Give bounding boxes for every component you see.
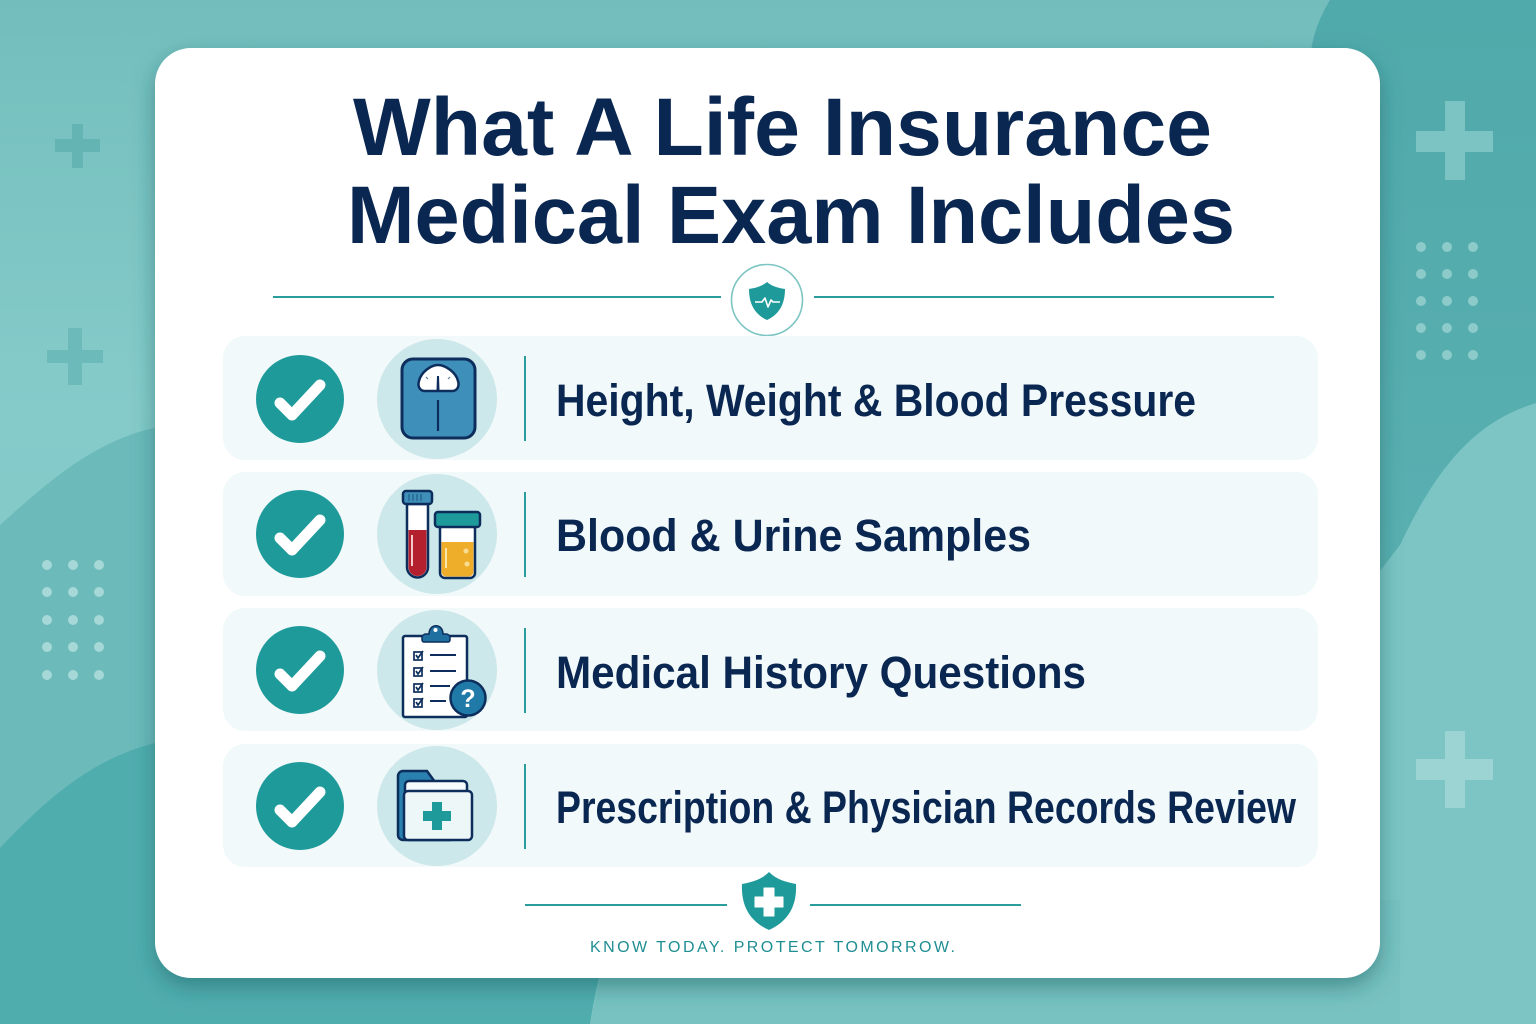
icon: bathroom scale (377, 339, 497, 459)
decorative plus top left (55, 124, 100, 168)
check icon 1 (256, 355, 344, 443)
check icon 3 (256, 626, 344, 714)
row 1: Height, Weight & Blood Pressure: Height, Weight & Blood Pressure (556, 375, 1196, 426)
row 3: Medical History Questions: Medical History Questions (556, 647, 1086, 698)
main card (155, 48, 1380, 978)
row 4: Prescription & Physician Records Review (223, 744, 1318, 867)
icon: medical folder (377, 746, 497, 866)
row 1: Height, Weight & Blood Pressure (223, 336, 1318, 460)
icon: clipboard with question mark (377, 610, 497, 730)
check icon 2 (256, 490, 344, 578)
title (347, 82, 1235, 261)
row 3: Medical History Questions (223, 608, 1318, 731)
check icon 4 (256, 762, 344, 850)
title: Medical Exam Includes (347, 170, 1235, 261)
dot grid left (42, 560, 104, 680)
row 4: Prescription & Physician Records Review: Prescription & Physician Records Review (556, 782, 1297, 833)
row 2: Blood & Urine Samples (223, 472, 1318, 596)
decorative plus bottom right (1416, 731, 1493, 808)
decorative plus mid left (47, 328, 103, 385)
title: What A Life Insurance (353, 82, 1212, 173)
row 2: Blood & Urine Samples: Blood & Urine Samples (556, 510, 1031, 561)
footer divider with shield (525, 872, 1021, 930)
icon: test tube and sample jar (377, 474, 497, 594)
decorative plus top right (1416, 101, 1493, 180)
title divider with shield badge (273, 264, 1274, 336)
dot grid right (1416, 242, 1478, 360)
icon: clipboard with question mark: ? (460, 685, 476, 713)
tagline: KNOW TODAY. PROTECT TOMORROW. (590, 939, 955, 956)
